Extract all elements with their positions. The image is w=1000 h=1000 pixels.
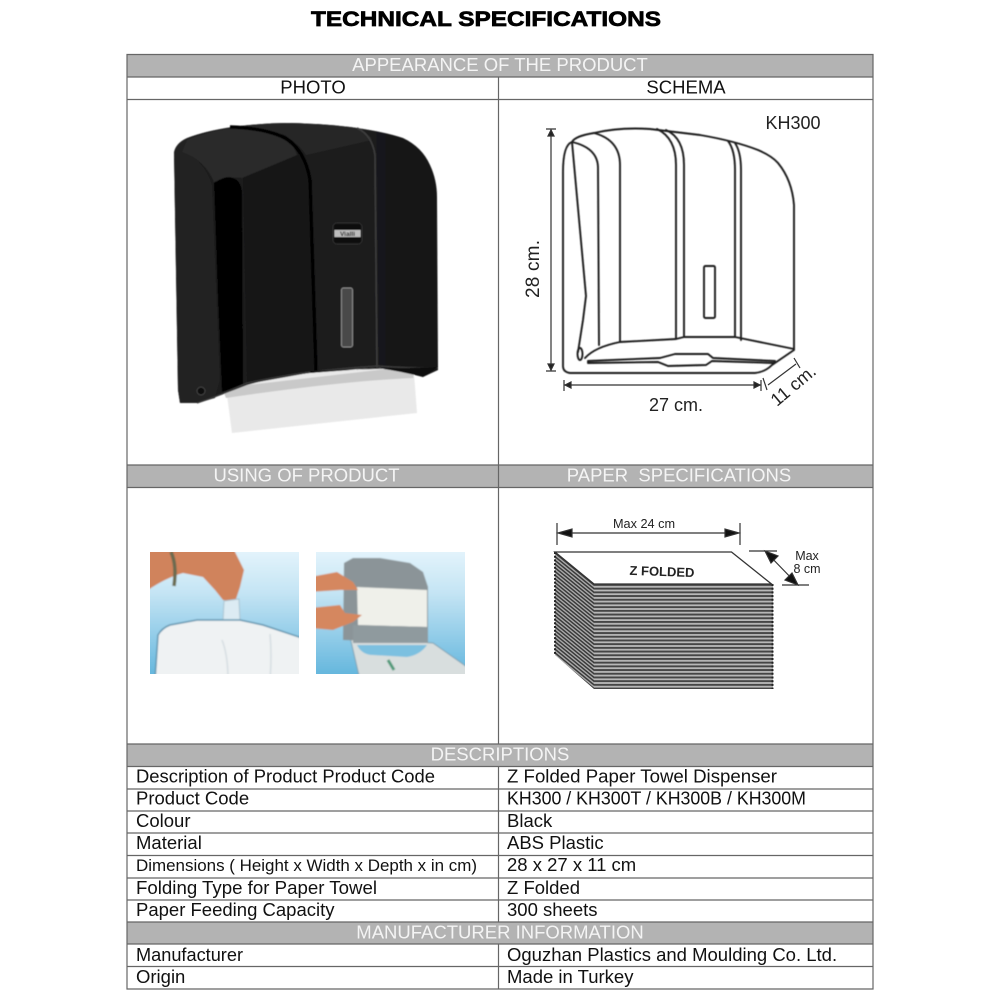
row: description of product: [136, 766, 777, 786]
row: colour: Black: [507, 810, 553, 831]
row: folding type: Z Folded: [507, 877, 580, 898]
section header: appearance of the product: APPEARANCE OF THE PRODUCT: [352, 54, 648, 75]
section header: descriptions: [127, 744, 873, 766]
schema: dispenser line drawing with dimensions: [523, 113, 821, 415]
depth dimension: [749, 551, 809, 585]
photo: black paper towel dispenser: [174, 123, 438, 433]
photo: pulling a towel from the dispenser: [150, 552, 299, 674]
title: TECHNICAL SPECIFICATIONS: [311, 8, 661, 31]
bracelet: [171, 552, 175, 586]
brand badge: Vialli: [340, 231, 355, 238]
height dimension: [546, 129, 556, 371]
section header: descriptions: DESCRIPTIONS: [431, 744, 569, 764]
row: paper feeding capacity: [136, 899, 598, 920]
width label: 27 cm.: [649, 395, 703, 415]
dispenser body: [174, 123, 438, 403]
row: origin: Made in Turkey: [507, 966, 634, 987]
depth label: 11 cm.: [767, 361, 820, 410]
depth dimension: [763, 358, 800, 390]
section header: paper specifications: PAPER SPECIFICATIONS: [567, 464, 791, 486]
row: paper feeding capacity: 300 sheets: [507, 899, 598, 920]
depth label: 8 cm: [793, 562, 821, 576]
row: folding type: [136, 877, 580, 898]
column heading: schema: SCHEMA: [646, 76, 726, 98]
hinge: [197, 387, 205, 395]
stack edges: [555, 552, 772, 689]
width dimension: [564, 380, 761, 391]
row: description of product: Z Folded Paper Towel Dispenser: [507, 766, 777, 786]
stack side: [555, 552, 594, 689]
row: manufacturer: [136, 944, 837, 965]
hands: [310, 572, 358, 592]
green detail: [388, 660, 394, 670]
row: paper feeding capacity: Paper Feeding Capacity: [136, 899, 335, 920]
section header: using of product: [127, 464, 873, 488]
section header: using of product: USING OF PRODUCT: [213, 464, 400, 486]
row: colour: [136, 810, 553, 831]
column heading: photo: PHOTO: [280, 76, 346, 98]
depth label: Max: [795, 549, 820, 563]
row: product code: [136, 788, 806, 808]
height label: 28 cm.: [523, 240, 544, 298]
row: material: [136, 832, 604, 853]
row: colour: Colour: [136, 810, 190, 831]
specifications table: [127, 54, 873, 989]
white dispenser: [155, 620, 305, 680]
stack front: [594, 584, 773, 689]
row: manufacturer: Oguzhan Plastics and Moulding Co. Ltd.: [507, 944, 837, 965]
paper towel: [225, 360, 417, 433]
hand and arm: [145, 548, 244, 602]
row: material: ABS Plastic: [507, 832, 604, 853]
lid: [350, 637, 470, 680]
row: folding type: Folding Type for Paper Towel: [136, 877, 377, 898]
row: product code: Product Code: [136, 788, 249, 808]
width dimension: [557, 523, 740, 545]
row: manufacturer: Manufacturer: [136, 944, 243, 965]
row: dimensions: Dimensions ( Height x Width x Depth x in cm): [136, 856, 477, 875]
row: origin: [136, 966, 634, 987]
row: dimensions: [136, 854, 636, 875]
row: product code: KH300 / KH300T / KH300B / KH300M: [507, 788, 806, 808]
row: description of product: Description of Product Product Code: [136, 766, 435, 786]
section header: manufacturer information: MANUFACTURER INFORMATION: [356, 922, 644, 942]
paper stack: [357, 587, 427, 627]
section header: manufacturer information: [127, 922, 873, 944]
open dispenser back plate: [343, 558, 428, 643]
row: material: Material: [136, 832, 202, 853]
brand badge: [333, 223, 362, 244]
dispenser outline: [563, 128, 794, 373]
level window: [342, 288, 352, 347]
stack top: [555, 552, 772, 584]
paper stack diagram: [555, 517, 821, 689]
row: dimensions: 28 x 27 x 11 cm: [507, 854, 636, 875]
model label: KH300: [765, 113, 821, 133]
top label: Z FOLDED: [629, 563, 695, 580]
row: origin: Origin: [136, 966, 185, 987]
photo: loading paper into the dispenser: [316, 552, 465, 674]
section header: appearance of the product: [127, 54, 873, 77]
pulled towel: [223, 599, 240, 621]
width label: Max 24 cm: [613, 517, 675, 531]
